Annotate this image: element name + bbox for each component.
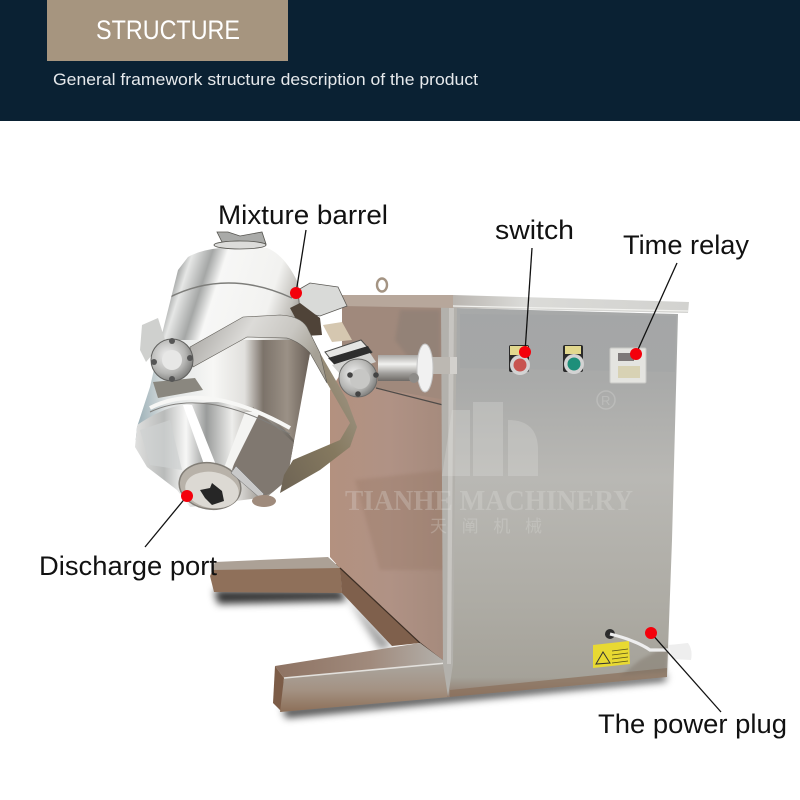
diagonal brace face (340, 568, 420, 646)
power cable (610, 634, 668, 650)
callout: mixture barrel (218, 200, 388, 299)
left axle flange (140, 318, 203, 398)
subtitle: General framework structure description of the product (53, 70, 478, 89)
barrel seam (168, 283, 292, 298)
callout: the power plug (598, 627, 787, 739)
section title tab: STRUCTURE (96, 15, 240, 45)
section title tab (47, 0, 288, 61)
watermark: TIANHE MACHINERY (345, 485, 633, 517)
barrel body (130, 245, 315, 510)
watermark (345, 391, 633, 536)
header banner (0, 0, 800, 121)
callout: discharge port: Discharge port (39, 551, 218, 581)
callout: mixture barrel: Mixture barrel (218, 200, 388, 230)
ground shadows (214, 590, 666, 718)
lifting eyelet (377, 278, 387, 292)
strap arm lower (280, 353, 357, 493)
red button (509, 345, 530, 375)
top lid clamp (214, 232, 266, 249)
cabinet lid (342, 295, 689, 313)
callout: the power plug: The power plug (598, 709, 787, 739)
discharge cone base (130, 402, 300, 510)
machine illustration (130, 232, 692, 718)
callout: time relay (623, 230, 750, 360)
right axle flange (325, 340, 379, 397)
cone reflections (183, 405, 216, 463)
discharge flange (175, 458, 276, 514)
power plug (669, 643, 692, 660)
control panel (509, 345, 646, 383)
rotating shaft (378, 344, 457, 392)
watermark: 天阐机械 (430, 517, 542, 536)
rear foot (210, 557, 342, 593)
cabinet front face (441, 300, 678, 697)
callout: time relay: Time relay (623, 230, 750, 260)
lower barrel shell (130, 340, 315, 440)
callout: switch: switch (495, 215, 574, 245)
time relay device (610, 348, 646, 383)
warning label and power cable (593, 629, 692, 668)
upper right flange clamp (290, 283, 352, 342)
cable grommet (605, 629, 615, 639)
green button (563, 345, 584, 374)
watermark: R (601, 393, 610, 408)
warning sticker (593, 641, 630, 668)
callout: discharge port (39, 490, 218, 581)
strap arm upper (190, 315, 327, 383)
front foot (273, 643, 450, 712)
callout: switch (495, 215, 574, 358)
mixture barrel (130, 232, 379, 514)
upper barrel shell (162, 248, 310, 360)
cabinet side panel (330, 296, 453, 664)
